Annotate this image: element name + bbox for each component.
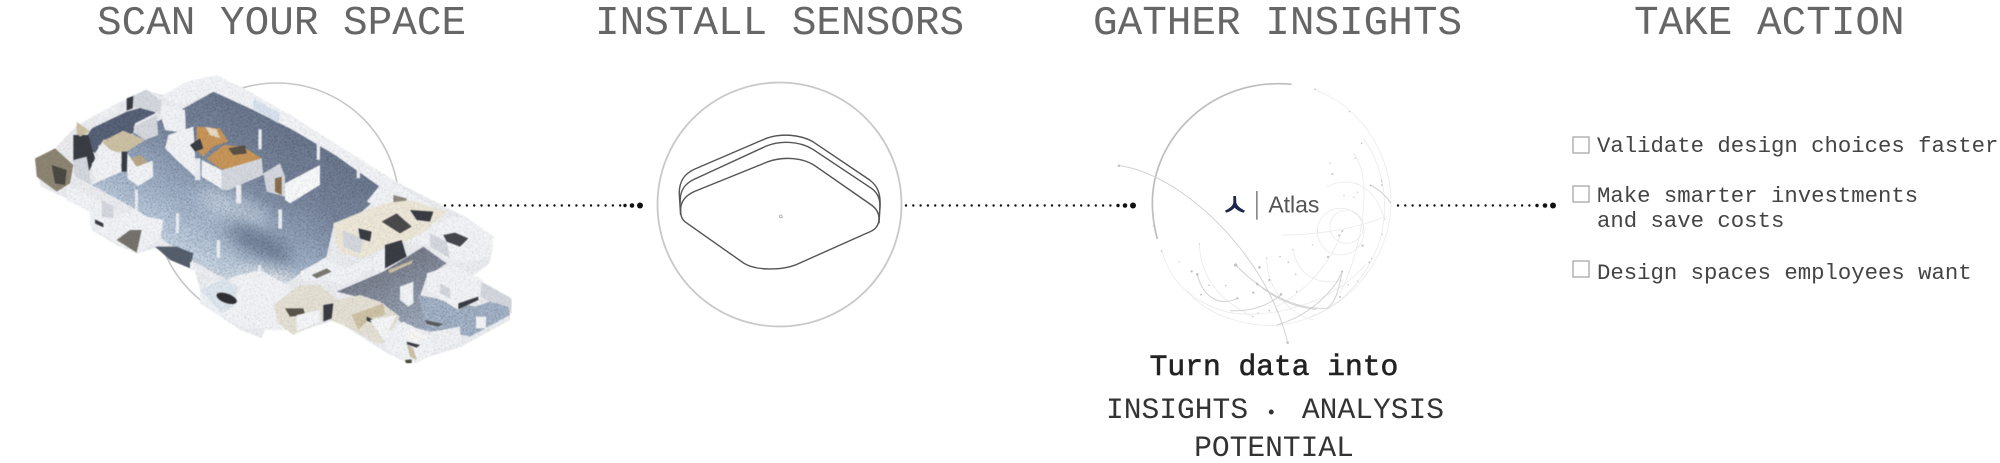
- small wall: [77, 122, 90, 137]
- sensor circle: [658, 82, 902, 326]
- bright floor patch: [228, 263, 298, 284]
- light floor patch: [192, 181, 275, 232]
- corner room dark opening: [215, 290, 238, 306]
- lower left walls: [67, 185, 163, 253]
- floor plan: 3D scan of office: [35, 75, 512, 363]
- block walls: [160, 105, 186, 133]
- end room: [383, 322, 433, 363]
- circle behind floor plan: [155, 83, 399, 327]
- corner room floor: [200, 278, 238, 313]
- main floor: [92, 91, 380, 284]
- pale patch on orange floor: [205, 127, 220, 138]
- data points: [1118, 88, 1386, 344]
- strong arcs: [1119, 166, 1391, 343]
- right top room walls: [367, 183, 445, 227]
- dark room with panel: [333, 200, 447, 258]
- heading: take action: TAKE ACTION: [1634, 1, 1905, 47]
- lower left detail: [117, 230, 142, 253]
- floor plan: upper and main area: [35, 75, 510, 363]
- orange room floor: [197, 127, 228, 157]
- desk cluster: [427, 265, 483, 310]
- darker floor patch: [222, 216, 298, 271]
- back wall tint: [253, 98, 280, 123]
- text: insights and analysis: INSIGHTS • ANALYSIS: [1106, 393, 1444, 427]
- dark upper-left floor: [83, 103, 157, 153]
- heading: scan your space: SCAN YOUR SPACE: [97, 1, 466, 47]
- floor plan: lower right wing: [273, 200, 512, 363]
- heading: gather insights: GATHER INSIGHTS: [1093, 1, 1462, 47]
- right circular room: [407, 217, 494, 263]
- subheading: turn data into: Turn data into: [1150, 350, 1398, 384]
- dotted connector 2: [906, 202, 1136, 208]
- room wall: [133, 115, 158, 140]
- left dark room: [73, 135, 95, 180]
- atlas data sphere: [1118, 84, 1391, 344]
- central dark spot: [190, 138, 203, 152]
- right end wall: [480, 282, 512, 313]
- dotted connector 3: [1398, 202, 1556, 208]
- orange room 2 floor: [207, 145, 262, 170]
- icon: atlas logo mark: [1225, 196, 1245, 213]
- top room cluster: [127, 89, 162, 113]
- orange room front walls: [202, 160, 223, 190]
- pillars: [135, 129, 360, 283]
- dotted connector 1: [445, 202, 643, 208]
- tan floor strip: [388, 260, 413, 273]
- lower front wall: [433, 327, 461, 353]
- logo text: Atlas: [1268, 192, 1319, 218]
- left wall partitions: [73, 157, 92, 185]
- dark opening: [127, 96, 133, 111]
- doorway room: [263, 163, 285, 197]
- silhouette base: [35, 76, 510, 363]
- mid room: [300, 258, 372, 285]
- checklist item: smarter investments: and save costs: [1597, 208, 1784, 234]
- white partition: [285, 165, 320, 203]
- small room floor: [130, 155, 148, 167]
- checklist item: validate design: Validate design choices faster: [1597, 133, 1998, 159]
- small room walls: [127, 153, 153, 186]
- dark divider: [122, 152, 127, 172]
- white freestanding block: [400, 282, 413, 307]
- orange room right wall: [222, 158, 263, 190]
- tan room floor: [102, 131, 145, 153]
- lower edge walls: [155, 247, 193, 268]
- lower rooms: [273, 285, 400, 343]
- icon: ceiling sensor: [679, 135, 880, 269]
- second floor: [337, 247, 510, 332]
- checklist item: smarter investments: Make smarter investments: [1597, 183, 1918, 209]
- top wall segment: [98, 103, 117, 120]
- speckled pale floor: [418, 295, 510, 337]
- tan room front walls: [92, 145, 122, 183]
- back wall: [163, 75, 396, 192]
- data arcs: [1162, 89, 1391, 325]
- heading: install sensors: INSTALL SENSORS: [595, 1, 964, 47]
- central rooms wall: [165, 127, 195, 177]
- left brown room: [35, 148, 73, 192]
- logo divider: [1256, 191, 1258, 220]
- checklist item: smarter investments: [1573, 183, 1918, 234]
- checklist item: design spaces: Design spaces employees want: [1597, 260, 1972, 286]
- left room shadow: [52, 165, 67, 185]
- sphere arc: [1152, 84, 1292, 239]
- dark room detail: [228, 145, 247, 155]
